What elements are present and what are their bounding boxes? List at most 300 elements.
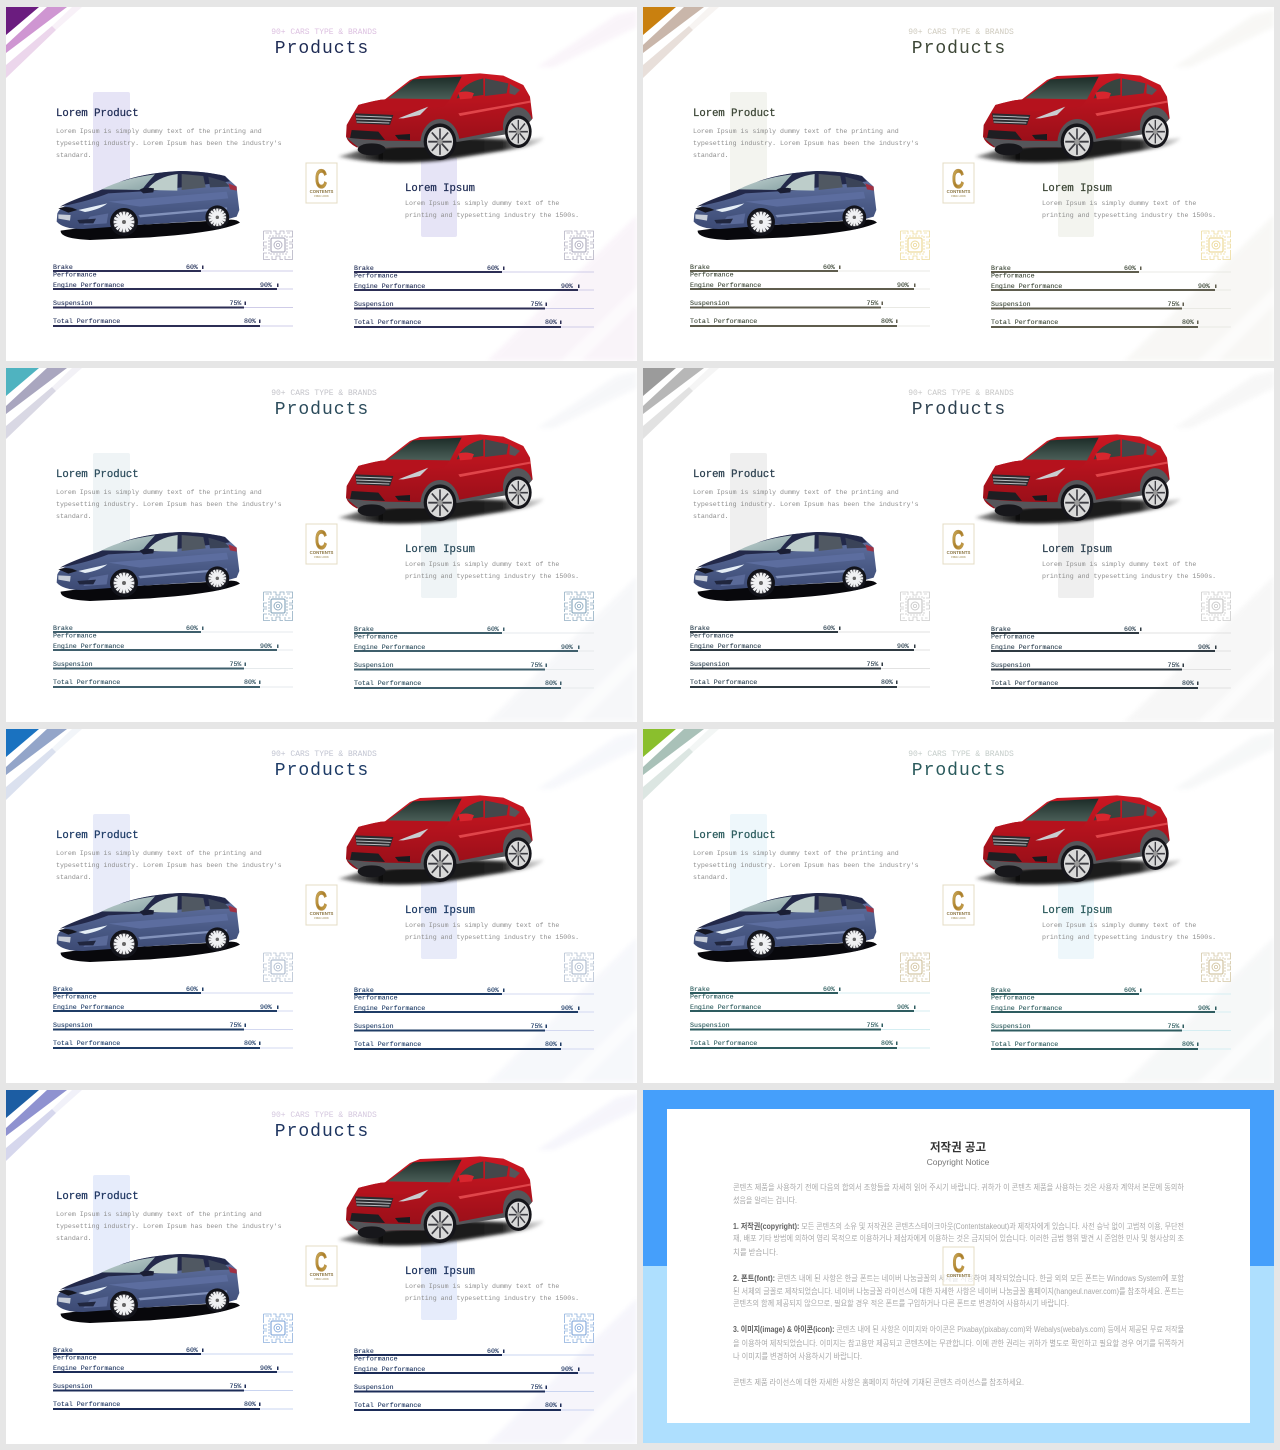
logo card: FREE LOOK xyxy=(314,1278,329,1281)
bar: engine: Engine Performance xyxy=(991,1005,1062,1012)
red car xyxy=(975,434,1180,524)
bar: suspension: Suspension xyxy=(690,661,730,668)
bar: brake: Performance xyxy=(690,994,734,1000)
left text block: Lorem Product xyxy=(693,830,776,842)
bar: suspension xyxy=(690,300,930,308)
right text block xyxy=(1042,183,1216,219)
bar: brake: Brake xyxy=(991,987,1011,994)
bar: engine xyxy=(690,643,930,651)
bar: suspension: Suspension xyxy=(690,300,730,307)
left text block: Lorem Product xyxy=(56,469,139,481)
background diagonals xyxy=(1124,10,1274,361)
bar: brake: Brake xyxy=(53,1347,73,1354)
panel: green theme slide xyxy=(643,729,1274,1083)
logo card: CONTENTS xyxy=(310,911,333,916)
bar: suspension xyxy=(354,1023,594,1032)
bar: brake xyxy=(354,626,594,640)
bar: suspension xyxy=(354,662,594,670)
subtitle: 90+ CARS TYPE & BRANDS xyxy=(908,28,1014,37)
title: Products xyxy=(275,1122,369,1142)
left text block xyxy=(56,830,282,881)
title: Products xyxy=(275,39,369,59)
corner stripes xyxy=(6,1090,82,1161)
bar: total: Total Performance xyxy=(354,1402,421,1409)
logo card: CONTENTS xyxy=(947,550,970,555)
bar: suspension: 75% xyxy=(866,1022,878,1029)
bar: engine: 90% xyxy=(561,1005,573,1012)
bar: total xyxy=(53,318,293,327)
bar: total: 80% xyxy=(881,318,893,325)
circuit icon left xyxy=(264,231,292,260)
blue car xyxy=(57,532,240,601)
left text block: Lorem Ipsum is simply dummy text of the printing and xyxy=(56,489,262,496)
panel: copyright notice slide xyxy=(643,1090,1274,1443)
bar: total: Total Performance xyxy=(53,679,120,686)
right text block xyxy=(405,905,579,941)
bar: suspension: Suspension xyxy=(991,301,1031,308)
bar: engine: 90% xyxy=(1198,283,1210,290)
bar: total: 80% xyxy=(881,1040,893,1047)
bar: brake: 60% xyxy=(487,626,499,633)
bar: total xyxy=(354,319,594,328)
bar: brake: Performance xyxy=(354,1356,398,1362)
red car xyxy=(338,1156,543,1246)
bar: total xyxy=(354,680,594,689)
subtitle: 90+ CARS TYPE & BRANDS xyxy=(271,750,377,759)
notice body text: 을 이용하여 제작되었습니다. 이미지는 참고용만 제공되고 콘텐츠에는 무관합니다. 이에 관한 권리는 귀하가 별도로 확인하고 필요할 경우 여기를 뒤쪽하거 xyxy=(733,1338,1184,1348)
bar: total xyxy=(53,679,293,688)
background diagonals xyxy=(487,371,637,722)
bar: brake xyxy=(53,1347,293,1362)
bar: brake xyxy=(991,626,1231,640)
logo card: C xyxy=(952,525,964,555)
bar: total: 80% xyxy=(545,319,557,326)
title: Products xyxy=(275,761,369,781)
right text block xyxy=(405,1266,579,1302)
bar: suspension: Suspension xyxy=(354,301,394,308)
bar: engine: Engine Performance xyxy=(690,643,761,650)
notice body text: 3. 이미지(image) & 아이콘(icon): 콘텐츠 내에 된 사항은 이미지와 아이콘은 Pixabay(pixabay.com)와 Webalys(webalys.com) 등에서 제공된 무료 저작물 xyxy=(733,1324,1184,1334)
left text block: Lorem Ipsum is simply dummy text of the printing and xyxy=(693,128,899,135)
circuit icon right xyxy=(564,592,594,620)
corner stripes xyxy=(6,7,82,78)
bars left xyxy=(53,1347,293,1410)
background diagonals xyxy=(487,10,637,361)
logo card: CONTENTS xyxy=(310,550,333,555)
bar: suspension: Suspension xyxy=(991,662,1031,669)
left text block xyxy=(56,1191,282,1242)
circuit icon left xyxy=(900,592,930,620)
bar: total: Total Performance xyxy=(991,680,1058,687)
red car xyxy=(338,73,543,163)
logo card: FREE LOOK xyxy=(951,917,966,920)
bars left xyxy=(53,986,293,1049)
left text block xyxy=(693,469,919,520)
right text block: Lorem Ipsum is simply dummy text of the xyxy=(1042,200,1196,207)
bar: brake: Brake xyxy=(354,1348,374,1355)
left text block: Lorem Product xyxy=(56,830,139,842)
bar: engine xyxy=(991,283,1231,291)
bar: suspension: 75% xyxy=(1168,1023,1179,1030)
bar: brake: Brake xyxy=(354,626,374,633)
bar: total: Total Performance xyxy=(690,1040,757,1047)
bar: engine: 90% xyxy=(897,643,909,650)
bar: brake: Brake xyxy=(690,625,710,632)
left text block: Lorem Ipsum is simply dummy text of the printing and xyxy=(56,1211,262,1218)
bar: engine: 90% xyxy=(260,1004,272,1011)
logo card: CONTENTS xyxy=(947,189,970,194)
left text block: Lorem Ipsum is simply dummy text of the printing and xyxy=(693,850,899,857)
bar: engine xyxy=(53,1004,293,1012)
bar: suspension: Suspension xyxy=(354,1384,394,1391)
right text block xyxy=(1042,905,1216,941)
bar: suspension xyxy=(991,301,1231,310)
bar: brake: Performance xyxy=(354,634,398,640)
logo card xyxy=(306,885,337,925)
bar: total: Total Performance xyxy=(53,1401,120,1408)
title: Products xyxy=(912,761,1006,781)
right text block: printing and typesetting industry the 1500s. xyxy=(1042,934,1216,941)
bar: brake: Brake xyxy=(991,626,1011,633)
bar: suspension: Suspension xyxy=(354,1023,394,1030)
left text block: standard. xyxy=(693,513,729,520)
logo card: FREE LOOK xyxy=(314,556,329,559)
tinted column right xyxy=(421,157,457,237)
bar: engine: Engine Performance xyxy=(354,283,425,290)
bar: suspension xyxy=(690,1022,930,1030)
tinted column left xyxy=(730,453,767,553)
tinted column left xyxy=(93,453,130,553)
bar: brake xyxy=(690,625,930,640)
tinted column left xyxy=(93,814,130,914)
bar: brake: 60% xyxy=(823,625,835,632)
left text block: standard. xyxy=(693,874,729,881)
bar: total: Total Performance xyxy=(354,680,421,687)
left text block: typesetting industry. Lorem Ipsum has been the industry's xyxy=(56,862,282,869)
bar: engine: 90% xyxy=(561,644,573,651)
bar: suspension: 75% xyxy=(866,300,878,307)
bar: engine xyxy=(690,282,930,290)
bar: brake xyxy=(354,265,594,280)
bar: total: 80% xyxy=(545,680,557,687)
bar: total: Total Performance xyxy=(354,319,421,326)
bars left xyxy=(690,625,930,688)
bar: suspension xyxy=(53,300,293,308)
left text block xyxy=(56,108,282,159)
logo card: C xyxy=(952,164,964,194)
notice subtitle: Copyright Notice xyxy=(927,1157,990,1167)
bar: total xyxy=(991,1041,1231,1050)
bar: suspension: 75% xyxy=(230,1383,241,1390)
bar: suspension: Suspension xyxy=(53,1383,93,1390)
corner stripes xyxy=(643,7,719,78)
bar: engine: Engine Performance xyxy=(53,1004,124,1011)
circuit icon right xyxy=(1202,231,1230,260)
bar: brake: 60% xyxy=(487,1348,499,1355)
logo card: C xyxy=(315,1247,327,1277)
bar: total xyxy=(690,318,930,327)
bar: brake: Brake xyxy=(690,264,710,271)
circuit icon left xyxy=(900,953,930,982)
bar: brake: Performance xyxy=(354,272,398,280)
logo card: CONTENTS xyxy=(310,189,333,194)
bar: engine: 90% xyxy=(561,283,573,290)
logo card: FREE LOOK xyxy=(951,556,966,559)
bar: brake: 60% xyxy=(1124,265,1136,272)
left text block: typesetting industry. Lorem Ipsum has been the industry's xyxy=(56,140,282,147)
left text block xyxy=(693,108,919,159)
bar: brake xyxy=(53,625,293,640)
bar: brake xyxy=(53,264,293,278)
background diagonals xyxy=(487,732,637,1083)
circuit icon right xyxy=(1202,953,1230,982)
logo card: C xyxy=(952,886,964,916)
bar: engine xyxy=(690,1004,930,1012)
logo card xyxy=(943,885,974,925)
bar: suspension xyxy=(53,1383,293,1392)
left text block xyxy=(693,830,919,881)
bar: brake: Brake xyxy=(53,264,73,271)
background diagonals xyxy=(1124,371,1274,722)
logo card: FREE LOOK xyxy=(314,195,329,198)
bar: engine xyxy=(53,643,293,651)
corner stripes xyxy=(6,729,82,800)
bar: suspension: 75% xyxy=(530,301,542,308)
bar: suspension: 75% xyxy=(530,1023,542,1030)
right text block: printing and typesetting industry the 1500s. xyxy=(1042,573,1216,580)
bar: brake: Brake xyxy=(53,625,73,632)
logo card: C xyxy=(952,1248,965,1278)
bar: brake xyxy=(53,986,293,1000)
bar: suspension: 75% xyxy=(1168,301,1179,308)
bars right xyxy=(354,987,594,1050)
bar: total: 80% xyxy=(244,1401,256,1408)
bar: engine: Engine Performance xyxy=(690,1004,761,1011)
right text block xyxy=(405,183,579,219)
bar: brake: Performance xyxy=(354,994,398,1002)
panel: teal theme slide xyxy=(6,368,637,722)
tinted column right xyxy=(421,518,457,598)
notice body text: 콘텐츠의 함께 제공되지 않으므로, 필요할 경우 적은 폰트를 구입하거나 다른 폰트로 변경하여 사용하시기 바랍니다. xyxy=(733,1298,1069,1308)
right text block: Lorem Ipsum is simply dummy text of the xyxy=(1042,922,1196,929)
red car xyxy=(338,434,543,524)
red car xyxy=(338,795,543,885)
logo card xyxy=(306,163,337,203)
notice body text: 된 서체의 글꼴로 제작되었습니다. 네이버 나눔글꼴 라이선스에 대한 자세한 사항은 네이버 나눔글꼴 홈페이지(hangeul.naver.com)를 참조하세요. 폰트는 xyxy=(733,1286,1184,1296)
bar: brake: 60% xyxy=(823,986,835,993)
bar: brake xyxy=(354,1348,594,1362)
left text block: standard. xyxy=(56,152,92,159)
right text block: Lorem Ipsum is simply dummy text of the xyxy=(405,561,559,568)
logo card: C xyxy=(315,886,327,916)
right text block: Lorem Ipsum xyxy=(1042,905,1112,917)
subtitle: 90+ CARS TYPE & BRANDS xyxy=(271,28,377,37)
bar: brake: Performance xyxy=(53,632,97,640)
right text block xyxy=(405,544,579,580)
bar: suspension: Suspension xyxy=(690,1022,730,1029)
subtitle: 90+ CARS TYPE & BRANDS xyxy=(908,389,1014,398)
left text block xyxy=(56,469,282,520)
bars right xyxy=(354,265,594,328)
circuit icon right xyxy=(564,953,594,982)
circuit icon right xyxy=(564,1314,594,1342)
bar: suspension: Suspension xyxy=(53,661,93,668)
bars right xyxy=(354,626,594,689)
bar: suspension: 75% xyxy=(530,662,542,669)
bar: brake: Performance xyxy=(690,272,734,278)
corner stripes xyxy=(643,368,719,439)
notice body text: 치를 받습니다. xyxy=(733,1247,778,1257)
tinted column left xyxy=(93,1175,130,1275)
logo card xyxy=(943,163,974,203)
notice body text: 셨음을 알리는 겁니다. xyxy=(733,1195,797,1205)
bar: brake: Brake xyxy=(354,987,374,994)
red car xyxy=(975,795,1180,885)
bar: suspension: 75% xyxy=(866,661,878,668)
logo card xyxy=(306,1246,337,1286)
bar: total xyxy=(690,679,930,688)
bar: total: 80% xyxy=(1182,319,1194,326)
left text block: Lorem Ipsum is simply dummy text of the printing and xyxy=(56,850,262,857)
right text block: printing and typesetting industry the 1500s. xyxy=(405,212,579,219)
background diagonals xyxy=(1124,732,1274,1083)
logo card xyxy=(306,524,337,564)
notice body text xyxy=(733,1182,1185,1387)
right text block xyxy=(1042,544,1216,580)
bar: brake: Performance xyxy=(53,994,97,1000)
left text block: standard. xyxy=(56,1235,92,1242)
bar: suspension xyxy=(53,661,293,670)
circuit icon right xyxy=(564,231,594,260)
logo card xyxy=(943,1247,974,1285)
left text block: Lorem Ipsum is simply dummy text of the printing and xyxy=(56,128,262,135)
bar: total: 80% xyxy=(1182,680,1194,687)
tinted column left xyxy=(730,92,767,192)
bar: total: Total Performance xyxy=(354,1041,421,1048)
panel: orange theme slide xyxy=(643,7,1274,361)
title: Products xyxy=(912,400,1006,420)
bar: engine: Engine Performance xyxy=(354,1005,425,1012)
bar: suspension: 75% xyxy=(230,1022,241,1029)
tinted column right xyxy=(1058,879,1094,959)
logo card xyxy=(943,524,974,564)
notice title: 저작권 공고 xyxy=(930,1140,986,1154)
blue car xyxy=(57,1254,240,1323)
blue car xyxy=(694,532,877,601)
logo card: FREE LOOK xyxy=(314,917,329,920)
bar: brake xyxy=(690,986,930,1000)
notice body text: 콘텐츠 제품을 사용하기 전에 다음의 합의서 조항들을 자세히 읽어 주시기 바랍니다. 귀하가 이 콘텐츠 제품을 사용하는 것은 사용자 계약서 본문에 동의하 xyxy=(733,1182,1185,1192)
bar: suspension xyxy=(991,1023,1231,1032)
panel: navy theme slide xyxy=(6,1090,637,1444)
bar: engine: 90% xyxy=(260,282,272,289)
blue car xyxy=(694,893,877,962)
panel: blue theme slide xyxy=(6,729,637,1083)
bar: suspension: Suspension xyxy=(991,1023,1031,1030)
bar: brake: Brake xyxy=(354,265,374,272)
notice body text: 1. 저작권(copyright): 모든 콘텐츠의 소유 및 저작권은 콘텐츠스테이크아웃(Contentstakeout)과 제작자에게 있습니다. 사전 승낙 없이 고범적 이용, 무단전 xyxy=(733,1221,1184,1231)
blue car xyxy=(57,171,240,240)
tinted column right xyxy=(421,879,457,959)
logo card: CONTENTS xyxy=(310,1272,333,1277)
right text block: Lorem Ipsum xyxy=(405,183,475,195)
left text block: Lorem Ipsum is simply dummy text of the printing and xyxy=(693,489,899,496)
notice body text: 2. 폰트(font): 콘텐츠 내에 된 사항은 한글 폰트는 네이버 나눔글꼴의 서체를 사용하여 제작되었습니다. 한글 외의 모든 폰트는 Windows System에 포함 xyxy=(733,1273,1185,1283)
corner stripes xyxy=(6,368,82,439)
left text block: standard. xyxy=(56,513,92,520)
bar: engine xyxy=(991,644,1231,652)
bar: brake: 60% xyxy=(487,987,499,994)
title: Products xyxy=(912,39,1006,59)
bar: brake xyxy=(991,265,1231,280)
white notice card xyxy=(667,1109,1250,1423)
subtitle: 90+ CARS TYPE & BRANDS xyxy=(271,389,377,398)
right text block: Lorem Ipsum xyxy=(405,1266,475,1278)
bar: total xyxy=(991,319,1231,328)
right text block: Lorem Ipsum is simply dummy text of the xyxy=(405,922,559,929)
right text block: printing and typesetting industry the 1500s. xyxy=(405,573,579,580)
bar: total: 80% xyxy=(1182,1041,1194,1048)
bar: brake: Performance xyxy=(53,1354,97,1362)
bar: engine xyxy=(354,283,594,291)
bars left xyxy=(53,625,293,688)
bar: brake: Brake xyxy=(53,986,73,993)
bar: brake xyxy=(354,987,594,1002)
bars left xyxy=(690,264,930,327)
tinted column right xyxy=(1058,518,1094,598)
bar: brake: 60% xyxy=(823,264,835,271)
left text block: Lorem Product xyxy=(56,1191,139,1203)
bar: engine: Engine Performance xyxy=(991,283,1062,290)
bars right xyxy=(991,626,1231,689)
bar: engine xyxy=(53,1365,293,1373)
bar: suspension xyxy=(53,1022,293,1030)
left text block: standard. xyxy=(693,152,729,159)
bar: engine xyxy=(53,282,293,290)
left text block: typesetting industry. Lorem Ipsum has been the industry's xyxy=(56,501,282,508)
right text block: Lorem Ipsum is simply dummy text of the xyxy=(405,200,559,207)
bar: engine: Engine Performance xyxy=(53,1365,124,1372)
bars right xyxy=(991,265,1231,328)
logo card: C xyxy=(315,525,327,555)
bar: brake: 60% xyxy=(487,265,499,272)
left text block: typesetting industry. Lorem Ipsum has been the industry's xyxy=(693,140,919,147)
right text block: Lorem Ipsum is simply dummy text of the xyxy=(1042,561,1196,568)
left text block: typesetting industry. Lorem Ipsum has been the industry's xyxy=(693,501,919,508)
bar: suspension: Suspension xyxy=(53,1022,93,1029)
tinted column left xyxy=(93,92,130,192)
bar: total xyxy=(53,1040,293,1049)
bar: engine: Engine Performance xyxy=(690,282,761,289)
blue car xyxy=(694,171,877,240)
notice body text: 나 이미지를 변경하여 사용하시기 바랍니다. xyxy=(733,1351,862,1361)
bar: engine xyxy=(354,1366,594,1374)
bar: total: 80% xyxy=(545,1041,557,1048)
blue car xyxy=(57,893,240,962)
bar: brake: 60% xyxy=(186,264,198,271)
bar: brake: 60% xyxy=(1124,626,1136,633)
bar: total: 80% xyxy=(881,679,893,686)
bar: engine: 90% xyxy=(1198,1005,1210,1012)
bar: brake: Brake xyxy=(690,986,710,993)
bar: suspension: 75% xyxy=(230,300,241,307)
right text block: Lorem Ipsum xyxy=(405,544,475,556)
bar: total: Total Performance xyxy=(53,1040,120,1047)
bar: total: Total Performance xyxy=(690,679,757,686)
left text block: Lorem Product xyxy=(56,108,139,120)
panel: purple theme slide xyxy=(6,7,637,361)
right text block: Lorem Ipsum xyxy=(1042,183,1112,195)
